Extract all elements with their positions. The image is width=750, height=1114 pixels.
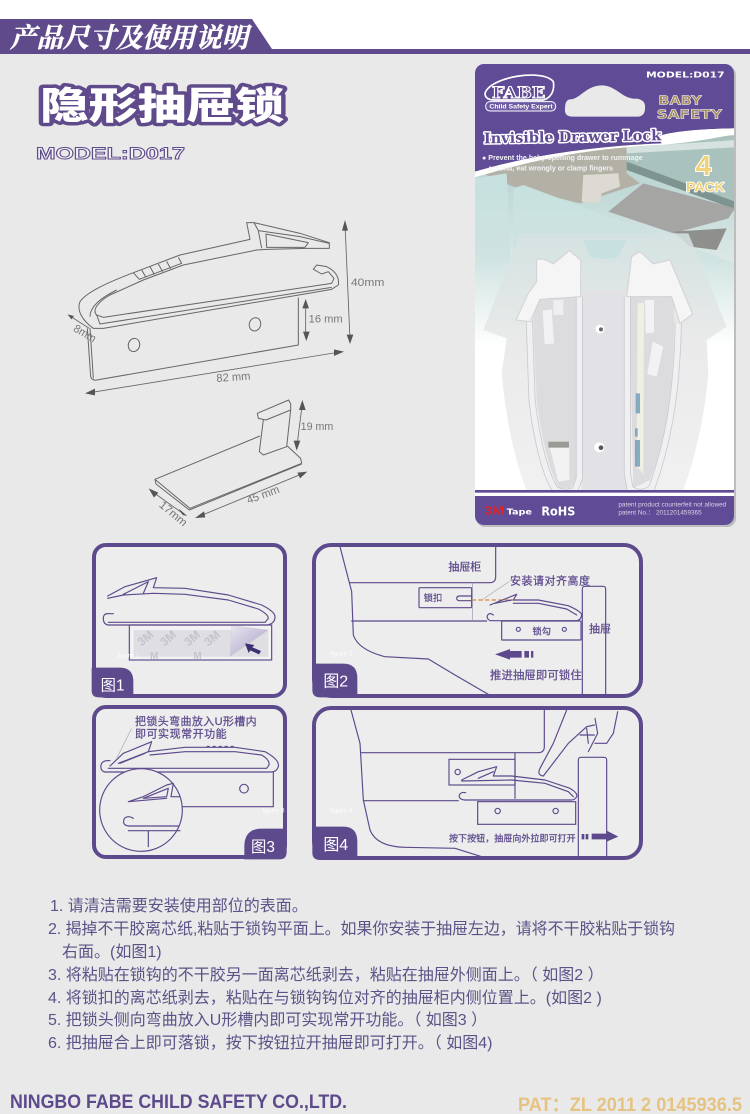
card footer: patent product counterfeit not allowed <box>618 503 726 509</box>
card description second line: around, eat wrongly or clamp fingers <box>488 166 613 173</box>
adhesive tape with 3M marks: 3M <box>157 628 179 649</box>
caption: 把锁头弯曲放入U形槽内 <box>135 714 257 728</box>
adhesive tape with 3M marks: 3M <box>181 628 203 649</box>
dimension 82mm <box>85 349 344 395</box>
card footer <box>475 490 735 527</box>
card footer: RoHS <box>541 504 575 518</box>
dimension 8mm <box>68 314 98 345</box>
figure tab: 图4 <box>323 837 348 854</box>
dimension drawing: lock hook <box>68 220 384 395</box>
watermark: figure 3 <box>262 808 285 815</box>
watermarks: figure 4 <box>330 808 353 815</box>
product title: 隐形抽屉锁 <box>40 75 284 130</box>
arrow <box>245 643 261 654</box>
adhesive tape with 3M marks: M <box>193 651 202 662</box>
dimension 40mm: 40mm <box>351 277 384 289</box>
drawer <box>582 586 611 694</box>
push arrow <box>495 649 533 660</box>
right lock <box>627 252 693 492</box>
dimension 19mm: 19 mm <box>301 421 333 433</box>
dimension 45mm: 45 mm <box>245 484 281 507</box>
dimension drawing: lock catch <box>149 400 333 529</box>
card shadow <box>476 66 736 527</box>
lock <box>487 594 582 621</box>
model number: MODEL:D017 <box>36 144 185 163</box>
header band: 产品尺寸及使用说明 <box>10 16 253 55</box>
cabinet label: 抽屉柜 <box>448 559 481 573</box>
package photo <box>475 135 734 281</box>
panel: figure 4 <box>312 708 641 860</box>
installation instructions: 2. 揭掉不干胶离芯纸,粘贴于锁钩平面上。如果你安装于抽屉左边，请将不干胶粘贴于锁钩 <box>48 920 675 938</box>
drawer: 抽屉 <box>589 621 611 635</box>
left lock <box>516 251 581 492</box>
dimension 17mm: 17mm <box>156 499 189 529</box>
installation instructions <box>48 897 675 1052</box>
adhesive tape with 3M marks: M <box>150 651 158 662</box>
figure tab <box>312 664 357 697</box>
installation instructions: 5. 把锁头侧向弯曲放入U形槽内即可实现常开功能。（ 如图3 ） <box>48 1011 487 1029</box>
buckle <box>419 588 472 608</box>
installation instructions: 1. 请清洁需要安装使用部位的表面。 <box>50 897 308 915</box>
hang hole <box>565 85 645 117</box>
header band <box>0 0 750 55</box>
four pack badge <box>686 155 726 192</box>
installation instructions: 3. 将粘贴在锁钩的不干胶另一面离芯纸剥去，粘贴在抽屉外侧面上。（ 如图2 ） <box>48 966 604 984</box>
four pack badge: 4 <box>696 150 712 181</box>
dimension 16mm <box>302 299 343 341</box>
panel: figure 1 <box>92 545 285 697</box>
baby safety second line: SAFETY <box>657 106 723 121</box>
baby safety: BABY <box>658 93 703 108</box>
hook plate: 锁勾 <box>532 625 551 636</box>
lock outline <box>103 578 275 625</box>
brand logo: FABE <box>492 83 545 102</box>
lock and plate <box>101 742 278 807</box>
installation instructions: 4. 将锁扣的离芯纸剥去，粘贴在与锁钩钩位对齐的抽屉柜内侧位置上。(如图2 ) <box>48 989 602 1007</box>
product name: Invisible Drawer Lock <box>484 127 662 147</box>
align guide: 安装请对齐高度 <box>510 574 590 588</box>
latch plate <box>449 759 515 785</box>
figure tab: 图3 <box>251 839 275 856</box>
buckle: 锁扣 <box>424 592 442 603</box>
dimension 19mm <box>294 400 333 451</box>
push caption: 推进抽屉即可锁住 <box>490 668 582 682</box>
drawer <box>578 757 607 857</box>
pointer line <box>117 728 132 758</box>
figure tab <box>244 829 287 859</box>
caption second line: 即可实现常开功能 <box>135 727 227 741</box>
magnifier circle <box>100 769 182 851</box>
figure tab: 图1 <box>101 678 125 695</box>
dimension 16mm: 16 mm <box>309 313 343 325</box>
card footer: 3M <box>484 503 504 517</box>
product package card <box>475 64 735 527</box>
card description: ● Prevent the baby opening drawer to rummage <box>482 155 643 162</box>
lock <box>459 767 577 800</box>
figure tab: 图2 <box>323 674 348 691</box>
watermark: figure 2 <box>330 651 353 658</box>
blister shell <box>483 233 727 492</box>
four pack badge: PACK <box>686 179 725 194</box>
card footer: patent No.： 2011201459365 <box>618 510 702 516</box>
center plate <box>582 324 626 490</box>
adhesive tape with 3M marks: 3M <box>201 628 223 649</box>
pull arrow <box>582 831 618 842</box>
card footer: Tape <box>507 508 533 517</box>
dimension 40mm <box>342 220 384 344</box>
figure tab <box>312 827 357 860</box>
figure tab <box>92 668 133 697</box>
watermark: figure 1 <box>117 653 140 660</box>
dimension 17mm <box>149 488 189 529</box>
pull caption: 按下按钮，抽屉向外拉即可打开 <box>449 832 576 843</box>
card model: MODEL:D017 <box>646 70 725 79</box>
company name: NINGBO FABE CHILD SAFETY CO.,LTD. <box>10 1092 347 1113</box>
hand pressing button <box>539 710 618 776</box>
installation instructions: 右面。(如图1) <box>62 943 162 961</box>
dimension 82mm: 82 mm <box>216 371 251 385</box>
cabinet lines <box>340 547 496 694</box>
dimension 8mm: 8mm <box>71 323 98 345</box>
hook plate <box>478 802 576 824</box>
adhesive tape with 3M marks: 3M <box>135 628 156 649</box>
hook plate <box>502 621 581 640</box>
adhesive tape with 3M marks <box>129 625 272 662</box>
panel: figure 2 <box>312 545 641 697</box>
brand logo: Child Safety Expert <box>489 104 553 111</box>
dimension 45mm <box>195 472 307 518</box>
align guide <box>472 574 590 600</box>
installation instructions: 6. 把抽屉合上即可落锁，按下按钮拉开抽屉即可打开。（ 如图4) <box>48 1034 492 1052</box>
purple header of card <box>475 64 735 194</box>
cabinet lines <box>351 710 544 857</box>
brand logo <box>485 75 556 111</box>
panel: figure 3 <box>94 707 287 859</box>
